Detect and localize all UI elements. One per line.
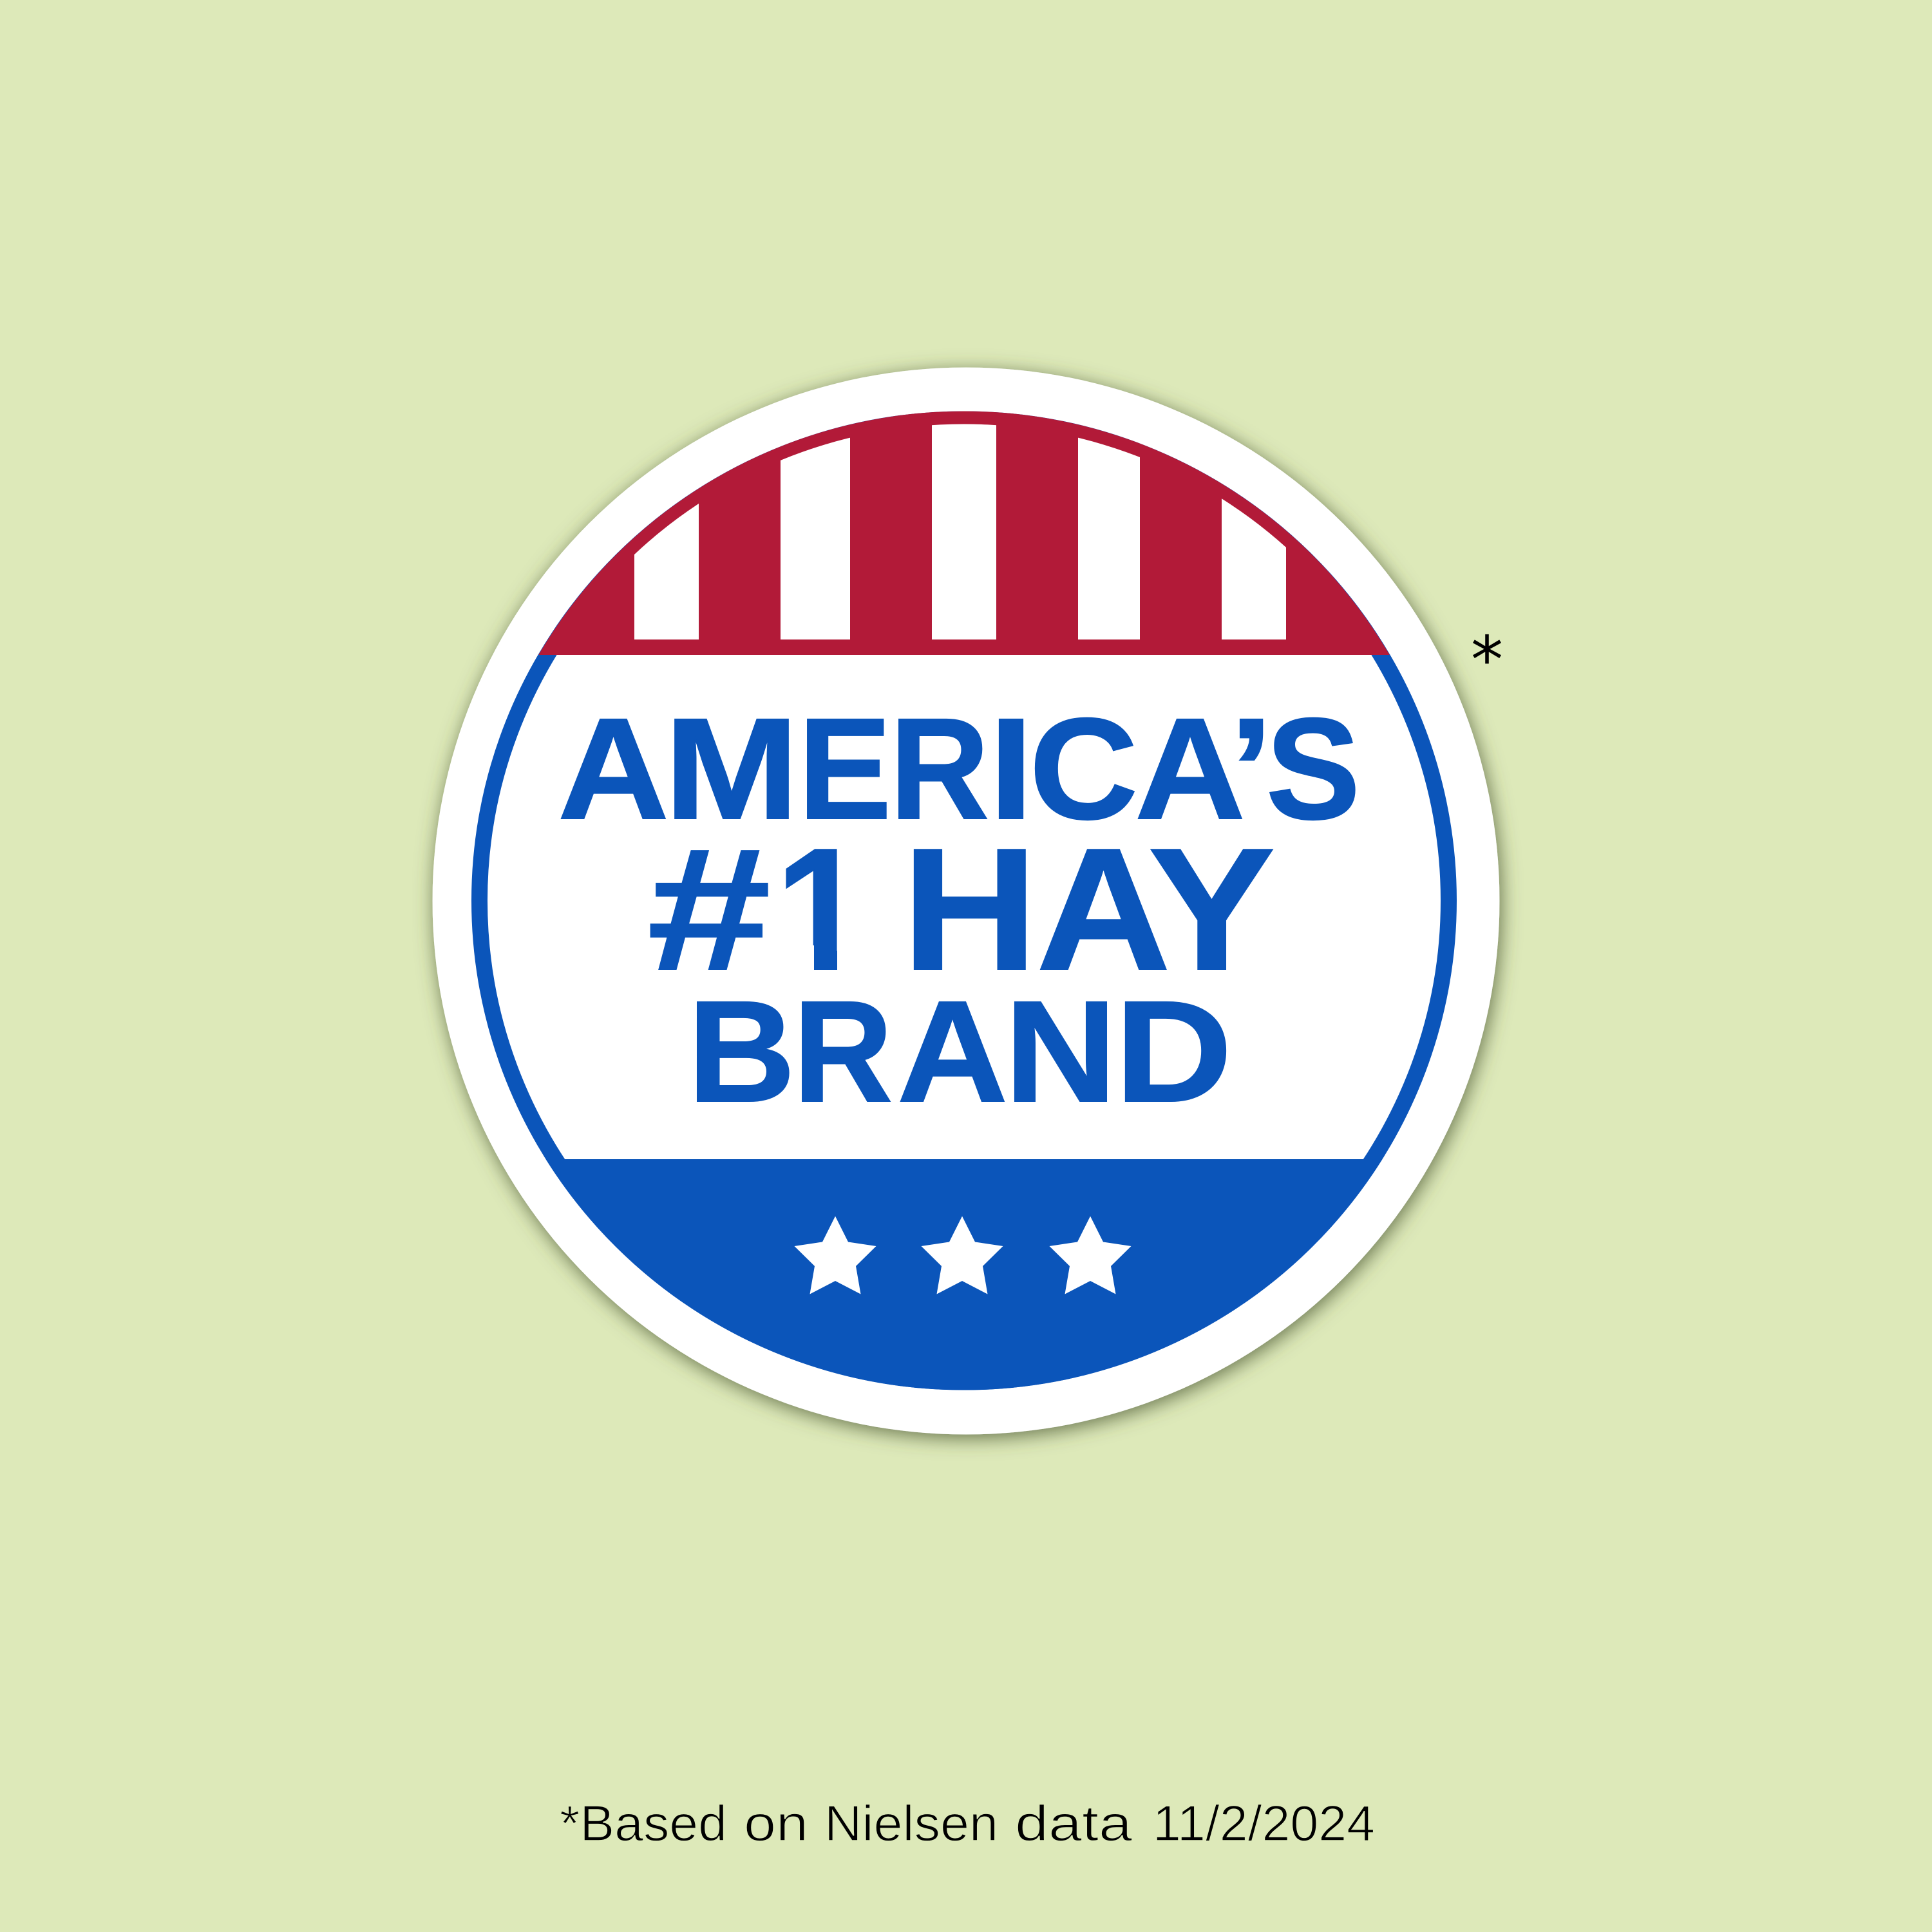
footnote: on bbox=[744, 1795, 808, 1852]
badge white disc with shadow bbox=[433, 367, 1499, 1435]
headline line 2: # bbox=[647, 813, 771, 1007]
headline line 3: N bbox=[1005, 971, 1117, 1132]
headline line 1: I bbox=[989, 688, 1034, 849]
headline line 3: D bbox=[1115, 971, 1233, 1132]
headline line 2: Y bbox=[1148, 813, 1275, 1007]
headline line 3: R bbox=[793, 971, 893, 1132]
three white stars bbox=[795, 1216, 1131, 1294]
headline line 3: B bbox=[688, 971, 795, 1132]
footnote: 11/2/2024 bbox=[1153, 1795, 1375, 1852]
headline line 3: A bbox=[897, 971, 1008, 1132]
star left bbox=[795, 1216, 876, 1294]
star right bbox=[1050, 1216, 1131, 1294]
asterisk next to badge: * bbox=[1471, 622, 1503, 697]
headline line 2: H bbox=[902, 813, 1037, 1007]
star center bbox=[921, 1216, 1003, 1294]
headline line 1: A bbox=[558, 688, 669, 849]
white hat stripes bbox=[634, 424, 1286, 639]
footnote: *Based bbox=[560, 1795, 727, 1852]
headline line 1: S bbox=[1266, 688, 1360, 849]
footnote: Nielsen bbox=[824, 1795, 998, 1852]
numeral one foot mask bbox=[770, 945, 876, 972]
headline: America's #1 Hay Brand bbox=[558, 688, 1360, 1132]
red hat band bbox=[538, 411, 1390, 655]
blue ring bbox=[479, 419, 1449, 1382]
footnote: data bbox=[1015, 1795, 1133, 1852]
headline line 1: M bbox=[665, 688, 799, 849]
headline line 1: ’ bbox=[1229, 688, 1273, 849]
headline line 1: E bbox=[799, 688, 891, 849]
headline line 2: A bbox=[1036, 813, 1171, 1007]
blue lower band bbox=[546, 1159, 1382, 1390]
badge bbox=[433, 367, 1499, 1435]
headline line 2: 1 bbox=[775, 813, 867, 1007]
headline line 1: C bbox=[1029, 688, 1138, 849]
headline line 1: A bbox=[1135, 688, 1245, 849]
headline line 1: R bbox=[890, 688, 989, 849]
infographic canvas bbox=[420, 357, 1516, 1841]
